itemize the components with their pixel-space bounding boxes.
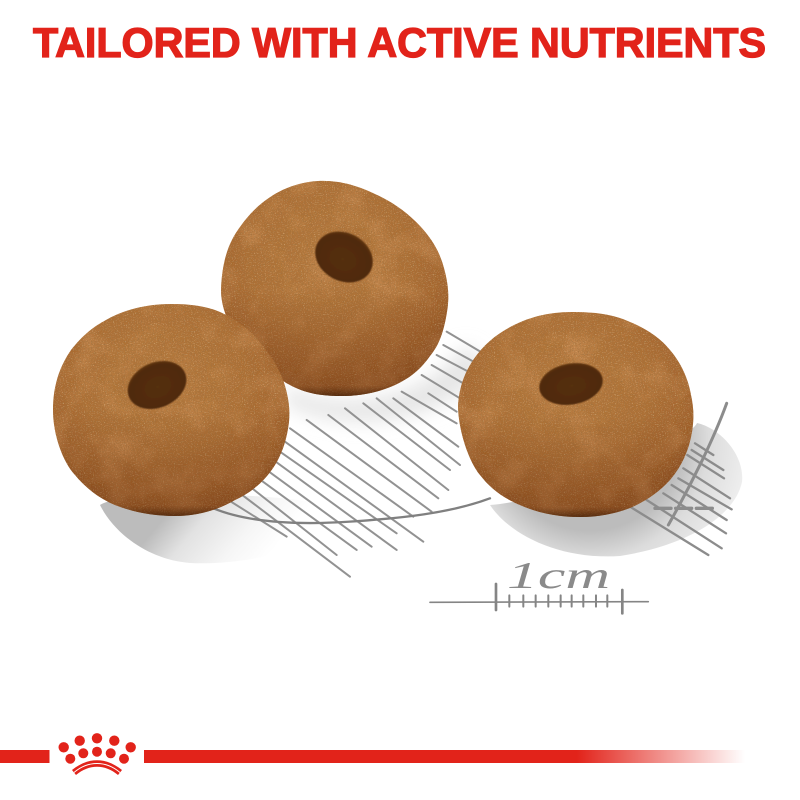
kibble hole (306, 222, 382, 292)
pencil stroke: dashes (655, 503, 715, 513)
scale label: 1cm (507, 555, 610, 597)
scale ruler (430, 584, 648, 613)
kibble: top (221, 181, 448, 396)
title: TAILORED WITH ACTIVE NUTRIENTS (33, 19, 766, 66)
kibble: right (458, 312, 693, 517)
pencil arc (213, 498, 490, 523)
shadow: top kibble (287, 345, 483, 422)
size scale: 1cm (430, 555, 648, 613)
footer bar: right with fade (144, 750, 745, 763)
kibble hole (120, 352, 194, 418)
kibble hole (536, 358, 606, 410)
kibble: left (53, 304, 289, 516)
pencil stroke: long diagonal (668, 403, 727, 525)
icon: Royal Canin crown logo (58, 733, 136, 775)
shadow: right kibble (490, 423, 742, 556)
shadow: left kibble (100, 495, 345, 563)
pencil hatching right of kibble (630, 403, 732, 555)
footer bar: left (0, 750, 50, 763)
pencil hatching between kibbles (213, 332, 490, 577)
